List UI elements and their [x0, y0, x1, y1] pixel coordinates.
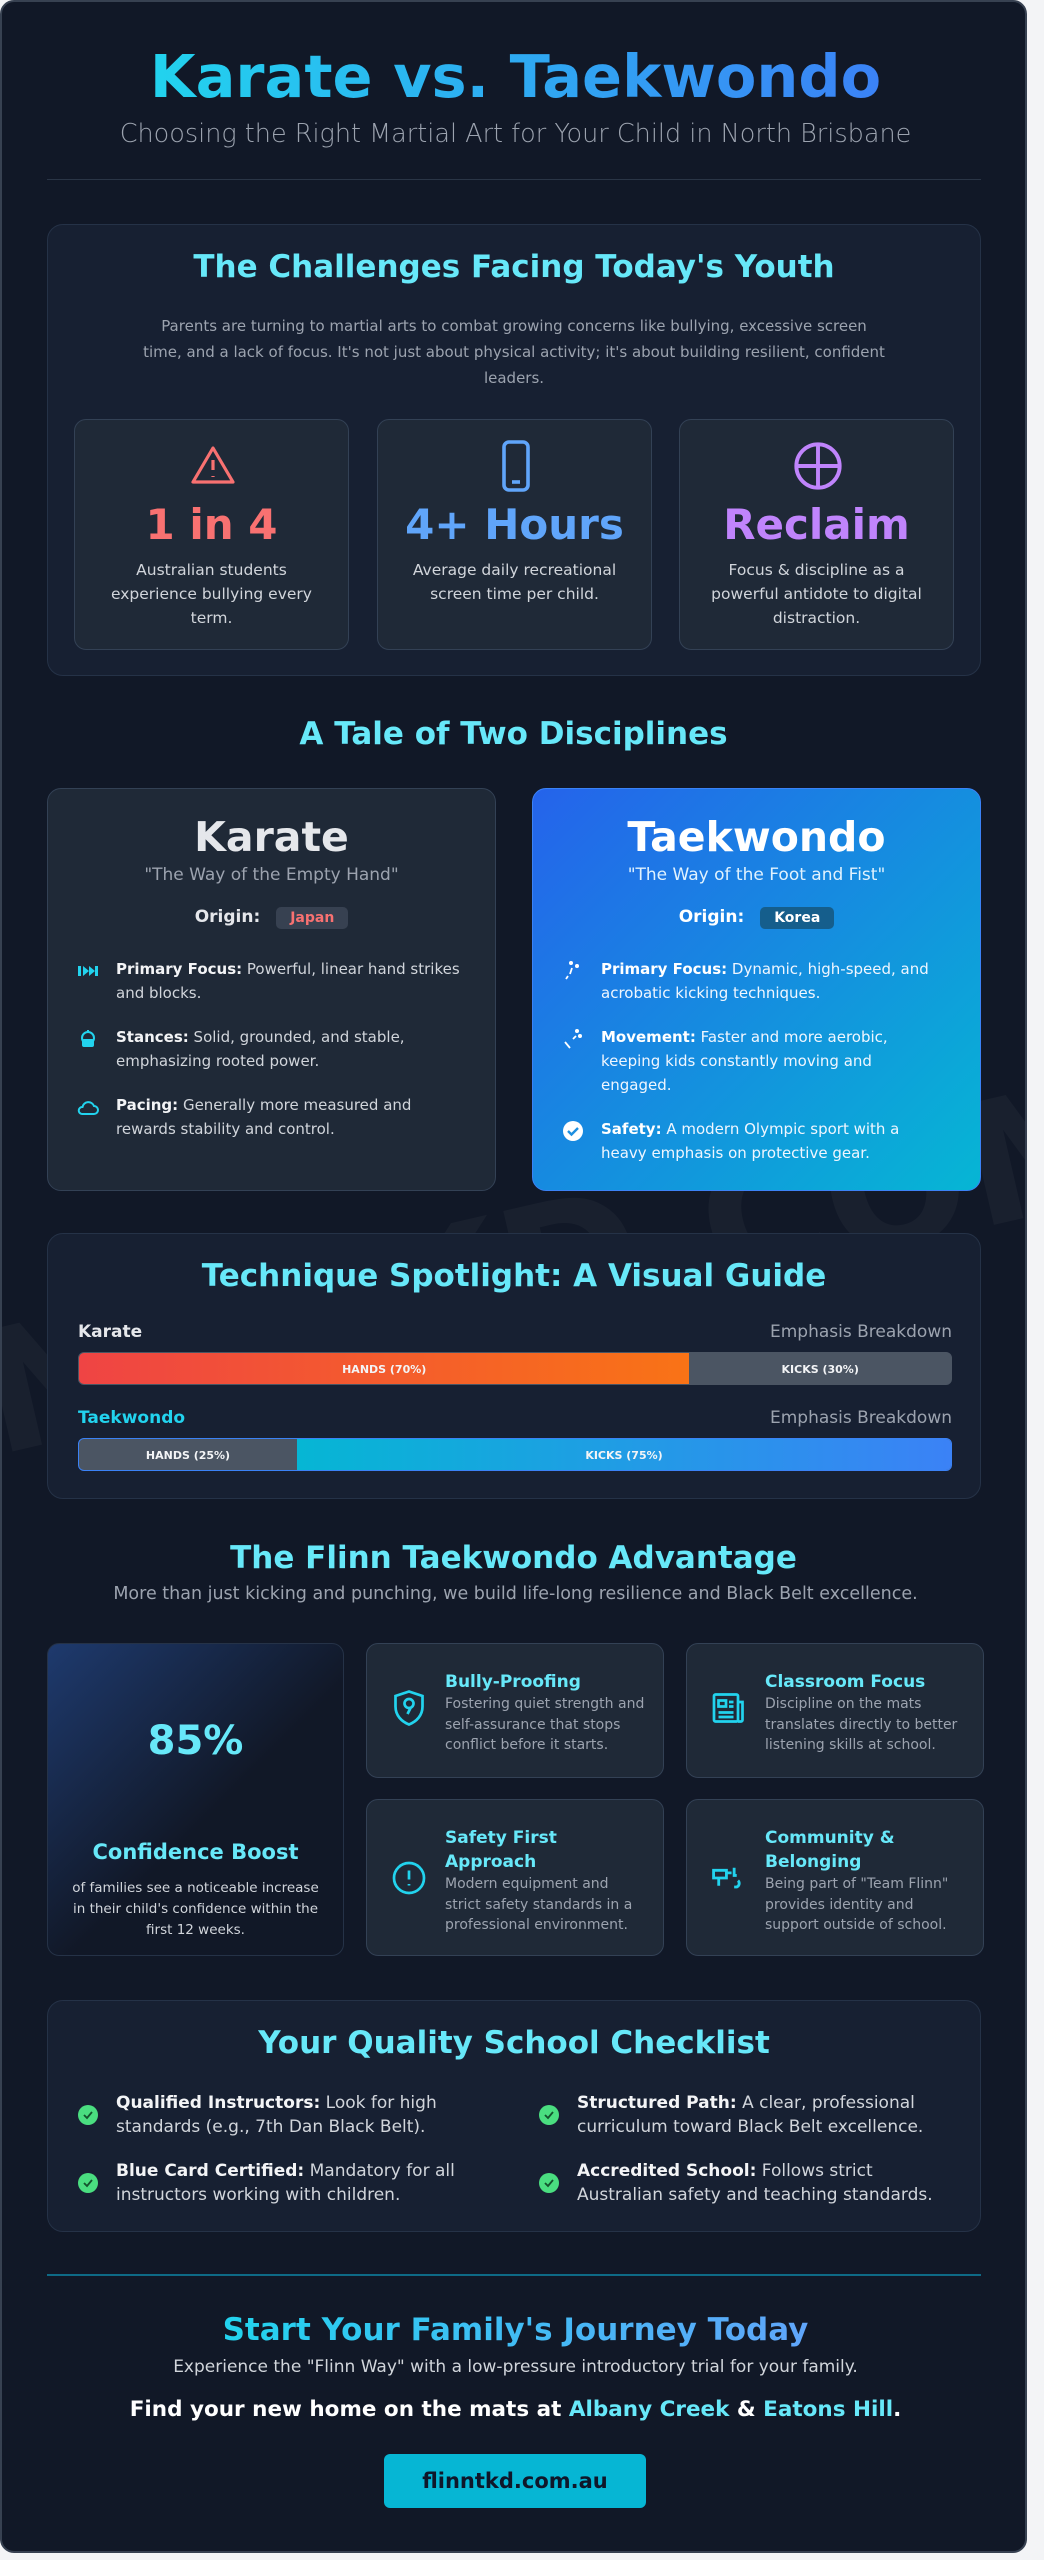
origin: korea: Origin:: [679, 907, 744, 927]
stat: bullying: [74, 419, 349, 650]
panel: taekwondo: Taekwondo: [627, 813, 886, 861]
card: community: [686, 1799, 984, 1956]
panel: checklist: [47, 2000, 981, 2232]
panel: taekwondo: [532, 788, 981, 1191]
icon: warning: [191, 446, 235, 484]
CTA locations: Find your new home on the mats at Albany Creek & Eatons Hill.: [130, 2397, 901, 2422]
item: accredited: Accredited School: Follows strict Australian safety and teaching standards.: [577, 2161, 933, 2205]
card: classroom focus: Discipline on the mats translates directly to better listening skills at school.: [765, 1696, 957, 1753]
panel: taekwondo: "The Way of the Foot and Fist": [628, 865, 885, 885]
intro text: Parents are turning to martial arts to combat growing concerns like bullying, excessive screen time, and a lack of focus. It's not just about physical activity; it's about building resilient, confident leaders.: [143, 317, 885, 387]
card: community: Being part of "Team Flinn" provides identity and support outside of school.: [765, 1876, 948, 1933]
stat: reclaim: [679, 419, 954, 650]
subtitle: Choosing the Right Martial Art for Your Child in North Brisbane: [120, 119, 911, 149]
subheading: advantage: More than just kicking and punching, we build life-long resilience and Black Belt excellence.: [113, 1584, 918, 1604]
origin: japan: [195, 907, 348, 929]
stat: bullying: 1 in 4: [146, 500, 278, 549]
origin: japan: Japan: [290, 910, 334, 926]
chart: taekwondo bar: Taekwondo: [78, 1408, 185, 1428]
stat: reclaim: Focus & discipline as a powerful antidote to digital distraction.: [711, 561, 922, 627]
card: classroom focus: [686, 1643, 984, 1778]
button: flinntkd.com.au: [422, 2469, 608, 2493]
heading: checklist: Your Quality School Checklist: [258, 2025, 770, 2061]
icon: shield: [394, 1690, 424, 1726]
bullet: primary focus: Primary Focus: Powerful, linear hand strikes and blocks.: [116, 960, 460, 1002]
panel: karate: Karate: [194, 813, 349, 861]
bullet: movement: Movement: Faster and more aerobic, keeping kids constantly moving and engaged.: [601, 1028, 888, 1094]
card: bully-proofing: [366, 1643, 664, 1778]
card: confidence boost: of families see a noticeable increase in their child's confidence within the first 12 weeks.: [72, 1880, 319, 1938]
panel: karate: [47, 788, 496, 1191]
bullet: primary focus: Primary Focus: Dynamic, high-speed, and acrobatic kicking techniques.: [601, 960, 929, 1002]
chart: taekwondo bar: HANDS (25%): [146, 1449, 230, 1462]
panel: karate: "The Way of the Empty Hand": [144, 865, 399, 885]
card: safety first: Safety First Approach: [445, 1828, 557, 1872]
item: qualified instructors: Qualified Instructors: Look for high standards (e.g., 7th Dan Black Belt).: [116, 2093, 437, 2137]
origin: korea: [679, 907, 834, 929]
stat: screen time: Average daily recreational screen time per child.: [413, 561, 616, 603]
chart: taekwondo bar: KICKS (75%): [585, 1449, 663, 1462]
icon: alert circle: [392, 1862, 426, 1894]
card: classroom focus: Classroom Focus: [765, 1672, 925, 1692]
heading: two disciplines: A Tale of Two Disciplines: [299, 716, 728, 752]
card: bully-proofing: Fostering quiet strength and self-assurance that stops conflict before it starts.: [445, 1696, 644, 1753]
heading: technique: Technique Spotlight: A Visual Guide: [202, 1258, 826, 1294]
chart: karate bar: Emphasis Breakdown: [770, 1322, 952, 1342]
stat: screen time: [377, 419, 652, 650]
card: confidence boost: Confidence Boost: [92, 1840, 298, 1864]
stat: bullying: Australian students experience bullying every term.: [111, 561, 312, 627]
card: safety first: [366, 1799, 664, 1956]
card: bully-proofing: Bully-Proofing: [445, 1672, 581, 1692]
CTA text: Experience the "Flinn Way" with a low-pressure introductory trial for your family.: [173, 2357, 858, 2377]
chart: karate bar: HANDS (70%): [342, 1363, 426, 1376]
chart: karate bar: Karate: [78, 1322, 142, 1342]
button: [384, 2454, 646, 2508]
chart: taekwondo bar: Emphasis Breakdown: [770, 1408, 952, 1428]
panel: challenges: [47, 224, 981, 676]
item: structured path: Structured Path: A clear, professional curriculum toward Black Belt excellence.: [577, 2093, 923, 2137]
chart: taekwondo bar: [78, 1408, 952, 1471]
heading: CTA: Start Your Family's Journey Today: [223, 2312, 808, 2348]
stat: reclaim: Reclaim: [723, 500, 910, 549]
panel: technique spotlight: [47, 1233, 981, 1499]
card: confidence boost: [47, 1643, 344, 1956]
origin: korea: Korea: [774, 910, 820, 926]
icon: phone: [502, 440, 530, 492]
icon: newspaper: [712, 1693, 744, 1723]
bullet: pacing: Pacing: Generally more measured and rewards stability and control.: [116, 1096, 411, 1138]
card: community: Community & Belonging: [765, 1828, 895, 1872]
chart: karate bar: [78, 1322, 952, 1385]
icon: handshake: [712, 1868, 741, 1888]
item: blue card: Blue Card Certified: Mandatory for all instructors working with children.: [116, 2161, 455, 2205]
chart: karate bar: KICKS (30%): [782, 1363, 859, 1376]
heading: challenges: The Challenges Facing Today's Youth: [193, 249, 835, 285]
icon: target: [794, 442, 842, 490]
heading: flinn advantage: The Flinn Taekwondo Advantage: [230, 1540, 797, 1576]
title: Karate vs. Taekwondo: [150, 42, 881, 111]
bullet: stances: Stances: Solid, grounded, and stable, emphasizing rooted power.: [116, 1028, 405, 1070]
stat: screen time: 4+ Hours: [405, 500, 624, 549]
bullet: safety: Safety: A modern Olympic sport with a heavy emphasis on protective gear.: [601, 1120, 899, 1162]
origin: japan: Origin:: [195, 907, 260, 927]
card: confidence boost: 85%: [148, 1718, 243, 1764]
card: safety first: Modern equipment and strict safety standards in a professional environment.: [445, 1876, 632, 1933]
